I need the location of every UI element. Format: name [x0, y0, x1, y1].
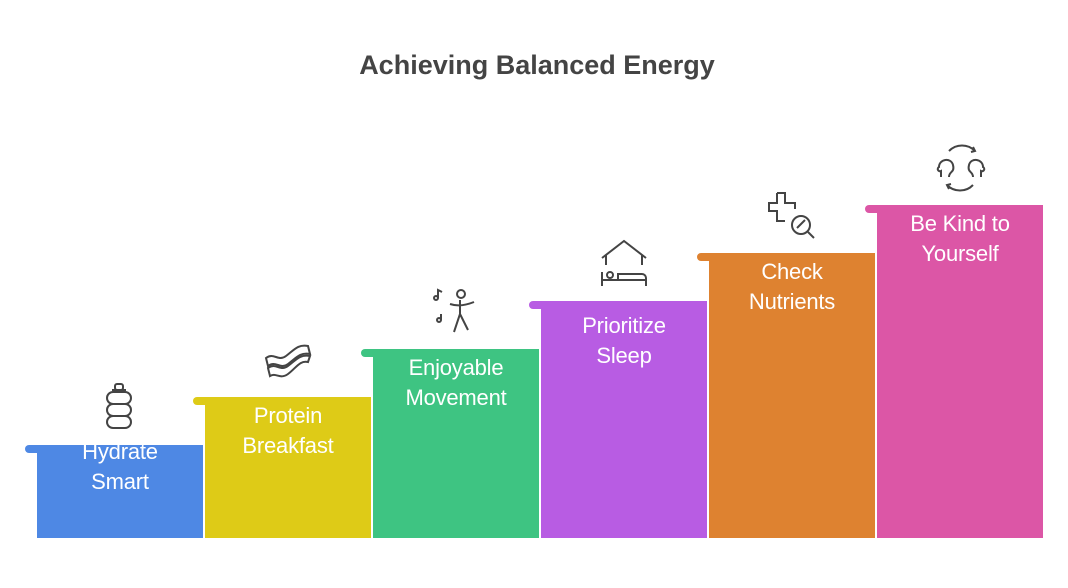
icon: bacon	[264, 344, 312, 378]
step: Be Kind to Yourself: Yourself	[921, 241, 999, 266]
icon: dancing person	[433, 288, 474, 332]
icon: bottle	[106, 383, 132, 429]
icon: heads with cycle arrows	[936, 144, 986, 192]
step: Prioritize Sleep: Prioritize	[582, 313, 666, 338]
step: Hydrate Smart: Smart	[91, 469, 149, 494]
step: Check Nutrients: Nutrients	[749, 289, 835, 314]
step: Check Nutrients	[697, 253, 875, 538]
step: Prioritize Sleep: Sleep	[596, 343, 652, 368]
title: Achieving Balanced Energy	[359, 50, 715, 80]
step: Enjoyable Movement	[361, 349, 539, 538]
step: Prioritize Sleep	[529, 301, 707, 538]
step: Protein Breakfast: Breakfast	[242, 433, 334, 458]
step: Be Kind to Yourself	[865, 205, 1043, 538]
icon: medical cross with pill	[768, 192, 815, 239]
step: Hydrate Smart: Hydrate	[82, 439, 158, 464]
icon: house with bed	[601, 240, 647, 286]
step: Check Nutrients: Check	[761, 259, 823, 284]
step: Hydrate Smart	[25, 439, 203, 538]
step: Protein Breakfast: Protein	[254, 403, 322, 428]
step: Protein Breakfast	[193, 397, 371, 538]
step: Enjoyable Movement: Movement	[405, 385, 507, 410]
step: Enjoyable Movement: Enjoyable	[409, 355, 503, 380]
step: Be Kind to Yourself: Be Kind to	[910, 211, 1010, 236]
